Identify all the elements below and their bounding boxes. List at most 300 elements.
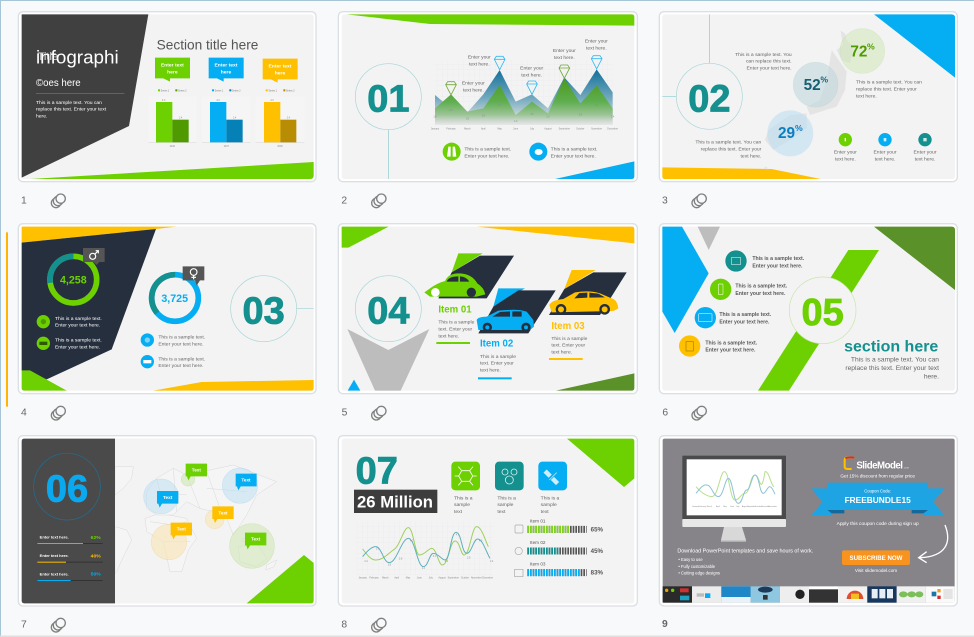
section text — [845, 356, 939, 381]
slide 2: section 01 mountain chart — [338, 12, 637, 208]
progress 62 percent: 62% — [91, 535, 101, 541]
meter item 01: Item 01 — [530, 518, 546, 523]
tile captions — [454, 495, 559, 515]
title heading: ©oes here — [36, 78, 81, 89]
map tag green bottom — [245, 533, 266, 549]
area chart: 1.8 — [466, 119, 470, 121]
area chart: July — [530, 128, 535, 130]
slide number 7: 7 — [21, 620, 27, 631]
area chart: 4.7 — [563, 101, 567, 103]
line chart: April — [394, 576, 399, 579]
line chart: 4.3 — [479, 541, 483, 543]
green diagonal stripe — [758, 250, 879, 391]
slide 7: section 06 world map — [18, 436, 316, 632]
text block right — [856, 80, 922, 99]
green corner — [342, 227, 389, 248]
feature text 2: This is a sample text. — [551, 146, 597, 152]
intro text: This is a sample text. You can — [36, 100, 102, 106]
item II: text here. — [875, 156, 895, 162]
icon: desktop monitor: May — [723, 506, 727, 508]
slide number 9: 9 — [662, 619, 668, 630]
26 Million label: 26 Million — [357, 493, 433, 512]
title heading — [36, 46, 119, 89]
area chart: March — [464, 127, 471, 130]
section text: This is a sample text. You can — [851, 356, 939, 363]
map tag yellow right — [212, 506, 234, 523]
line chart: January — [359, 576, 368, 579]
diamond markers — [446, 56, 602, 95]
coupon ribbon — [811, 483, 945, 516]
slide number 1: 1 — [21, 196, 27, 207]
item 02: This is a sample — [480, 354, 516, 360]
icon: desktop monitor: September — [747, 505, 757, 508]
thumbnail strip — [663, 586, 955, 603]
callout blue: Enter text — [214, 63, 238, 69]
chart annotations: text here. — [463, 87, 484, 93]
text block top: This is a sample text. You — [735, 52, 792, 58]
bar chart 2016: Series 1 — [161, 89, 170, 92]
apply text: Apply this coupon code during sign up — [837, 521, 919, 527]
callout yellow: here — [275, 70, 285, 76]
chart annotations: Enter your — [468, 55, 491, 61]
line chart: August — [438, 576, 446, 579]
area chart: April — [481, 127, 486, 130]
icon: desktop monitor: August — [742, 505, 748, 508]
area chart: May — [497, 128, 503, 130]
area chart: August — [544, 127, 552, 130]
green bottom wedge — [30, 162, 314, 179]
coupon ribbon: Coupon Code: — [864, 488, 891, 493]
number circle 01: 01 — [367, 79, 409, 121]
coupon ribbon: FREEBUNDLE15 — [845, 495, 911, 505]
progress 40 percent: 40% — [91, 553, 101, 559]
area chart: 1.8 — [433, 117, 437, 119]
list item light 1: This is a sample text. — [158, 335, 205, 341]
area chart: December — [607, 127, 618, 130]
bar chart 2018: 4.3 — [270, 100, 274, 102]
area chart: November — [591, 127, 602, 130]
car 2 tile — [478, 288, 556, 333]
intro text — [36, 100, 107, 119]
item III — [913, 133, 937, 162]
map tag yellow left — [171, 523, 192, 539]
car 1 tile — [438, 253, 514, 298]
dark green bottom wedge — [556, 373, 634, 391]
section text: replace this text. Enter your text — [845, 365, 939, 372]
number circle 06: 06 — [46, 469, 88, 511]
chart annotations — [462, 39, 608, 93]
map tag green top — [186, 464, 207, 480]
callout green: here — [167, 69, 178, 75]
feature text 1: This is a sample text. — [464, 146, 511, 152]
line chart: October — [461, 576, 469, 579]
stat 72 percent: % — [867, 42, 875, 52]
number circle 04: 04 — [367, 290, 409, 332]
icon: yellow car — [549, 291, 618, 315]
dark side panel — [22, 439, 115, 603]
number circle 03 — [231, 276, 297, 342]
icon: stack of coins — [372, 194, 386, 208]
icon: piggy bank — [529, 143, 547, 161]
bar chart 2018: Series 1 — [268, 89, 278, 92]
item 02 — [478, 339, 516, 379]
slide number 8: 8 — [341, 620, 347, 631]
map tag yellow right: Text — [218, 510, 228, 515]
connector line — [387, 130, 390, 179]
number circle 06 — [34, 453, 100, 520]
bar chart 2018: 2.4 — [287, 118, 291, 120]
blue hexagon shape — [662, 227, 709, 333]
bar chart 2017 — [202, 89, 251, 148]
line chart — [357, 522, 494, 579]
feature text 1 — [464, 146, 511, 159]
title heading: infographi — [36, 46, 119, 67]
chart annotations: text here. — [586, 46, 607, 52]
icon: green beetle car — [424, 273, 485, 297]
area chart: 3.7 — [498, 105, 502, 107]
area chart: January — [431, 127, 440, 130]
line chart: 3.6 — [376, 549, 380, 551]
curved arrow — [919, 525, 948, 563]
bar chart 2018: Series 2 — [286, 89, 295, 92]
item 02: text here. — [480, 368, 501, 374]
blue triangle — [348, 380, 360, 391]
section title: Section title here — [157, 37, 258, 52]
list item light 2 — [141, 355, 205, 369]
bullet list: • Easy to use — [678, 557, 703, 562]
chart annotations: Enter your — [553, 48, 576, 54]
visit text: Visit slidemodel.com — [855, 568, 897, 573]
tag: male symbol — [83, 248, 105, 265]
bar chart 2016: 4.3 — [162, 100, 166, 102]
stat 29 percent: % — [795, 123, 803, 133]
feature text 2: Enter your text here. — [551, 153, 596, 159]
text block right: replace this text. Enter your — [856, 87, 917, 93]
list item 3 — [695, 307, 772, 328]
green corner — [22, 370, 67, 391]
list item 1: Enter your text here. — [752, 263, 803, 269]
list item dark 2 — [37, 337, 102, 350]
tile captions: This is a — [497, 495, 516, 501]
bar chart 2017: Series 2 — [232, 89, 241, 92]
car 3 tile — [549, 270, 627, 315]
item 02: text. Enter your — [480, 361, 514, 367]
icon: stack of coins — [51, 618, 65, 632]
chart annotations: text here. — [469, 62, 490, 68]
donut 4,258 — [47, 253, 100, 306]
line chart: 4.2 — [410, 541, 414, 543]
text block right: text here. — [856, 93, 877, 99]
bullet list: • Fully customizable — [678, 564, 716, 569]
callout green: Enter text — [161, 63, 184, 69]
list item 1 — [725, 250, 805, 272]
icon: desktop monitor: February — [699, 506, 706, 508]
progress 50 percent: Enter text here. — [40, 571, 69, 576]
line chart: 1.2 — [422, 568, 426, 570]
list item 2: This is a sample text. — [735, 284, 788, 290]
area chart: 2.0 — [546, 117, 550, 119]
intro text: replace this text. Enter your text — [36, 107, 107, 113]
meter item 01: 65% — [591, 526, 604, 533]
line chart: June — [417, 577, 423, 579]
icon: desktop monitor: July — [736, 506, 739, 508]
list item 4 — [679, 335, 758, 357]
item I: Enter your — [834, 150, 857, 156]
donut 3,725 — [142, 265, 208, 331]
discount text: Get 15% discount from regular price — [840, 473, 915, 478]
item 01 — [436, 304, 475, 344]
list item dark 2: Enter your text here. — [55, 344, 100, 350]
blue corner — [874, 14, 955, 78]
list item 4: This is a sample text. — [705, 340, 758, 346]
line chart: 2.4 — [445, 561, 449, 563]
download text: Download PowerPoint templates and save hours of work. — [677, 548, 813, 554]
subscribe button — [842, 550, 910, 565]
number circle 02 — [676, 63, 742, 129]
text block right: This is a sample text. You can — [856, 80, 922, 86]
slide number 3: 3 — [662, 196, 668, 207]
text block left: text here. — [741, 153, 761, 159]
yellow top wedge — [477, 227, 634, 243]
line chart: 2.4 — [364, 561, 368, 563]
bullet list: • Cutting edge designs — [678, 571, 720, 576]
map tag yellow left: Text — [177, 527, 186, 532]
chart annotations: Enter your — [585, 39, 608, 45]
meter item 02: 45% — [591, 548, 604, 555]
icon: desktop monitor: November — [761, 506, 770, 508]
feature text 1: Enter your text here. — [464, 153, 510, 159]
tile captions: text — [454, 509, 463, 515]
meter item 02: Item 02 — [530, 540, 546, 545]
callout green — [155, 58, 190, 82]
item 03 — [549, 321, 588, 360]
bar chart 2018 — [256, 89, 304, 148]
connector lines — [662, 14, 709, 96]
list item 2: Enter your text here. — [735, 291, 786, 297]
SlideModel logo: .com — [903, 466, 910, 469]
icon: desktop monitor — [682, 456, 786, 542]
icon: binoculars — [443, 143, 461, 161]
stat 52 percent — [793, 62, 838, 107]
progress 50 percent — [37, 571, 103, 581]
progress 62 percent: Enter text here. — [40, 535, 69, 540]
grey arrow shape — [347, 329, 429, 391]
meter item 01 — [515, 518, 604, 533]
map bubbles — [144, 468, 274, 568]
map tag green bottom: Text — [251, 537, 261, 542]
chart annotations: Enter your — [462, 80, 485, 86]
item II: Enter your — [873, 150, 897, 156]
line chart: 2.4 — [490, 561, 494, 563]
item III: text here. — [915, 156, 935, 162]
line chart: 1.8 — [388, 565, 392, 567]
bar chart 2017: Series 1 — [215, 89, 224, 92]
stat 52 percent: 52 — [804, 77, 821, 94]
map of Japan — [764, 31, 853, 170]
item III: Enter your — [913, 150, 937, 156]
slide 9: promotional banner — [659, 436, 957, 630]
list item light 1 — [141, 333, 205, 347]
meter item 02 — [515, 540, 604, 555]
green corner — [247, 555, 314, 603]
dark green corner — [874, 227, 955, 290]
progress 40 percent: Enter text here. — [40, 553, 69, 558]
slide 1: section title with bar charts — [18, 12, 316, 208]
text block top: can replace this text. — [746, 59, 792, 65]
line chart: September — [448, 576, 459, 579]
area chart: October — [576, 127, 585, 130]
icon: stack of coins — [692, 194, 706, 208]
grey triangle — [698, 227, 720, 250]
stat 29 percent: 29 — [778, 125, 795, 142]
icon tile: molecule — [451, 462, 480, 490]
slide number 6: 6 — [662, 408, 668, 419]
stat 52 percent: % — [820, 74, 828, 84]
item II — [873, 133, 897, 162]
item I: text here. — [835, 156, 856, 162]
icon: stack of coins — [692, 406, 706, 420]
yellow bottom wedge — [153, 380, 314, 391]
list item 4: Enter your text here. — [705, 348, 756, 354]
item 01: Item 01 — [438, 304, 472, 315]
line chart: December — [482, 576, 493, 579]
area chart: 2.4 — [611, 116, 615, 118]
item 01: text. Enter your — [438, 326, 472, 332]
progress 50 percent: 50% — [91, 572, 101, 578]
item 03: text here. — [551, 350, 572, 356]
icon: desktop monitor: October — [755, 505, 762, 508]
icon: stack of coins — [51, 406, 65, 420]
list item dark 2: This is a sample text. — [55, 338, 102, 344]
text block top — [735, 52, 792, 71]
area chart: 3.4 — [595, 105, 599, 107]
area chart: 2.8 — [482, 115, 486, 117]
subscribe button: SUBSCRIBE NOW — [849, 555, 903, 562]
number circle 02: 02 — [688, 78, 730, 120]
SlideModel logo — [845, 457, 910, 471]
line chart: 3.1 — [433, 556, 437, 558]
list item light 2: Enter your text here. — [158, 363, 204, 369]
tile captions: text — [541, 509, 549, 515]
slide 8: section 07 line chart and bars — [338, 436, 637, 632]
item 01: This is a sample — [438, 320, 475, 326]
progress 62 percent — [37, 535, 103, 544]
icon: desktop monitor: March — [707, 506, 712, 508]
number circle 03: 03 — [243, 290, 285, 332]
map tag blue left: Text — [163, 495, 173, 500]
bar chart 2016: 2016 — [170, 146, 176, 148]
SlideModel logo: SlideModel — [856, 460, 903, 471]
bar chart 2016 — [148, 89, 197, 148]
area chart: February — [446, 127, 456, 130]
feature text 2 — [551, 146, 597, 159]
slide number 5: 5 — [342, 408, 348, 419]
bar chart 2017: 2017 — [224, 146, 230, 148]
list item dark 1 — [37, 315, 102, 329]
green corner — [567, 439, 634, 487]
tile captions: This is a — [454, 495, 473, 501]
list item 1: This is a sample text. — [752, 256, 805, 262]
navy shape — [22, 229, 156, 379]
slide 5: section 04 cars — [338, 224, 637, 420]
line chart: May — [406, 577, 411, 579]
area chart: June — [513, 128, 519, 130]
list item light 2: This is a sample text. — [158, 356, 205, 362]
donut 3,725: 3,725 — [161, 293, 188, 305]
area chart: 2.8 — [579, 115, 583, 117]
tile captions: This is a — [541, 495, 559, 501]
bar chart 2018: 2018 — [277, 146, 283, 148]
chart annotations: Enter your — [520, 65, 543, 71]
icon: blue car — [477, 310, 534, 332]
icon: desktop monitor: December — [768, 506, 777, 508]
stat 72 percent — [840, 29, 885, 73]
tag: female symbol — [183, 266, 204, 286]
meter item 03 — [515, 562, 604, 577]
list item light 1: Enter your text here. — [158, 341, 204, 347]
title heading: Title — [37, 51, 58, 63]
text block left — [695, 140, 762, 159]
yellow bottom wedge — [662, 167, 821, 179]
line chart: February — [369, 576, 379, 579]
item I — [834, 133, 857, 162]
number 07: 07 — [356, 450, 398, 492]
item 03: text. Enter your — [551, 343, 585, 349]
list item 3: Enter your text here. — [719, 319, 770, 325]
section heading: section here — [844, 339, 938, 356]
item 03: Item 03 — [551, 321, 585, 332]
area chart: 3.1 — [530, 114, 534, 116]
callout blue: here — [221, 69, 231, 75]
number circle 05 — [789, 277, 856, 344]
slide number 2: 2 — [341, 196, 347, 207]
area chart: September — [559, 127, 570, 130]
icon: desktop monitor: June — [730, 506, 734, 508]
slide 3: section 02 map with percentages — [659, 12, 957, 208]
meter item 03: 83% — [591, 570, 604, 577]
line chart: July — [429, 577, 434, 579]
bar chart 2016: 2.4 — [179, 118, 183, 120]
item 01: text here. — [438, 333, 459, 339]
callout yellow: Enter text — [268, 64, 292, 70]
connector line — [297, 307, 314, 310]
blue bottom wedge — [555, 161, 634, 179]
map tag blue left — [157, 491, 178, 508]
world map — [115, 465, 277, 573]
area chart — [431, 60, 618, 130]
icon tile: satellite — [538, 462, 567, 490]
map tag green top: Text — [192, 468, 201, 473]
slide number 4: 4 — [21, 407, 27, 418]
callout blue — [209, 58, 244, 82]
list item dark 1: This is a sample text. — [55, 316, 102, 322]
list item 2 — [710, 279, 788, 300]
donut 4,258: 4,258 — [60, 275, 87, 287]
bar chart 2016: Series 2 — [178, 89, 187, 92]
yellow top wedge — [22, 227, 177, 243]
item 03: This is a sample — [551, 336, 588, 342]
number circle 05: 05 — [802, 292, 844, 334]
list item 3: This is a sample text. — [719, 312, 772, 318]
divider line — [36, 92, 124, 95]
number circle 04 — [355, 276, 421, 342]
number circle 01 — [355, 64, 421, 130]
bullet list — [678, 557, 720, 576]
slide 4: section 03 donut charts — [6, 224, 316, 420]
icon: stack of coins — [372, 406, 386, 420]
area chart: 4.4 — [449, 110, 453, 112]
map tag blue right: Text — [241, 478, 251, 483]
